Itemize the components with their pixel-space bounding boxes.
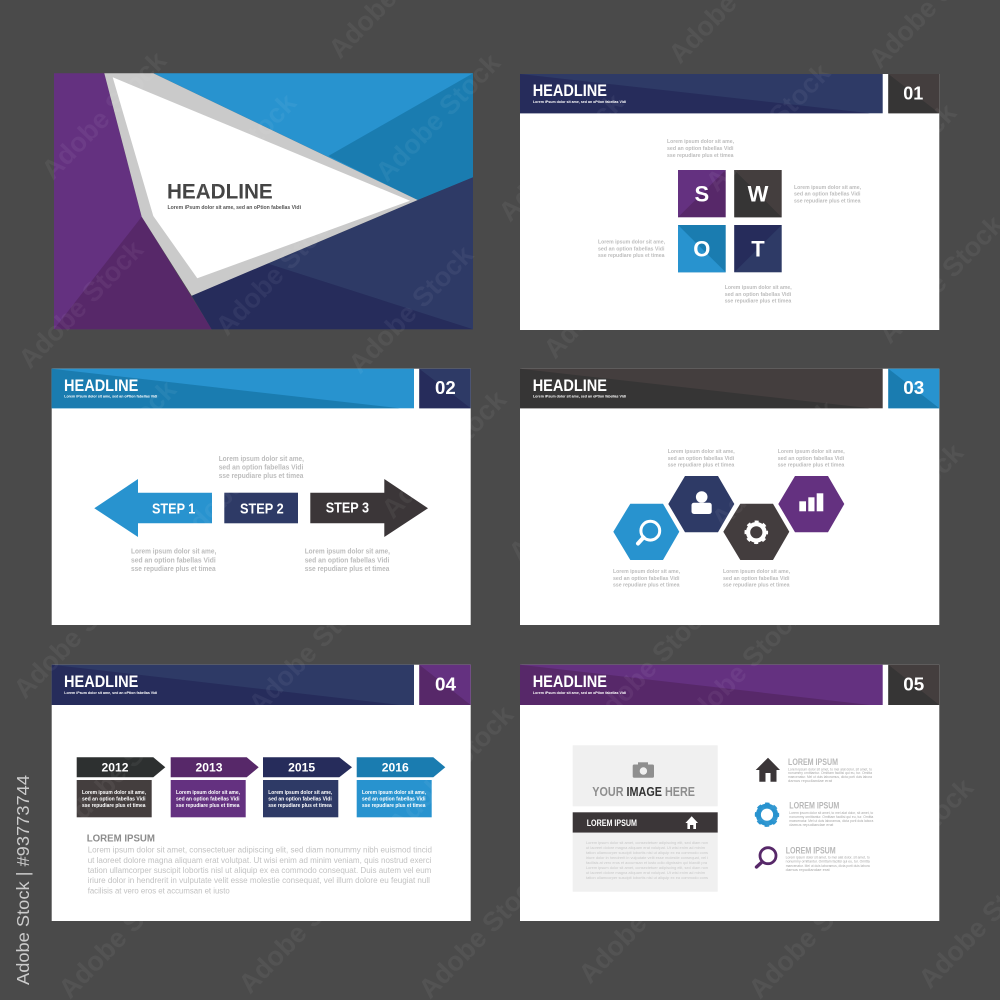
watermarks: Adobe Stock <box>383 699 520 839</box>
text block bottom 1: sse repudiare plus et timea <box>613 583 680 589</box>
SWOT square W: W <box>748 182 769 207</box>
watermarks: Adobe Stock <box>233 859 370 999</box>
feature: search: maecenatur. Mel ut duis laboramus, dicta porti duis labora <box>786 864 870 868</box>
body paragraph: tation ullamcorper suscipit lobortis nisl ut aliquip ex ea commodo consequat. Duis autem vel eum <box>88 865 431 875</box>
watermarks: Adobe Stock <box>36 45 173 185</box>
timeline item 2016: 2016 <box>382 761 409 775</box>
number badge 02: 02 <box>435 378 456 398</box>
text block bottom 2: sse repudiare plus et timea <box>723 583 790 589</box>
number badge 01: 01 <box>903 83 923 103</box>
watermarks: Adobe Stock <box>46 374 183 514</box>
text block top: sed an option fabellas Vidi <box>219 462 303 472</box>
timeline item 2012: Lorem ipsum dolor sit ame, <box>82 790 146 796</box>
watermarks: Adobe Stock <box>833 437 970 577</box>
text block bottom 1: Lorem ipsum dolor sit ame, <box>613 569 680 575</box>
number badge 02 <box>419 369 471 408</box>
number badge 04: 04 <box>435 674 456 694</box>
SWOT square S: S <box>694 182 709 207</box>
header bar <box>520 665 883 705</box>
watermarks: Adobe Stock <box>573 849 710 989</box>
text block bottom: sed an option fabellas Vidi <box>725 292 792 298</box>
timeline item 2015: Lorem ipsum dolor sit ame, <box>268 790 333 796</box>
header bar: Lorem iPsum dolor sit ame, sed an oPtion fabellas Vidi <box>533 690 626 695</box>
text card: tation ullamcorper suscipit lobortis nisl ut aliquip ex ea commodo cons <box>586 875 708 880</box>
timeline item 2012: 2012 <box>102 761 129 775</box>
text card: Lorem ipsum dolor sit amet, consectetuer adipiscing elit, sed diam non <box>586 840 708 845</box>
header bar: HEADLINE <box>533 673 607 691</box>
text card: ut laoreet dolore magna aliquam erat volutpat. Ut wisi enim ad minim <box>586 845 705 850</box>
image placeholder <box>573 745 718 806</box>
watermarks: Adobe Stock <box>493 87 630 227</box>
panel: slide 03 hexagons <box>520 369 939 625</box>
text block left: sse repudiare plus et timea <box>598 253 665 259</box>
header bar: HEADLINE <box>64 377 138 395</box>
timeline item 2016: sed an option fabellas Vidi <box>362 796 426 802</box>
timeline item 2013: 2013 <box>196 761 223 775</box>
watermarks: Adobe Stock <box>343 239 480 379</box>
text card <box>573 833 718 892</box>
timeline item 2013: sed an option fabellas Vidi <box>176 796 240 802</box>
text block bottom left: sed an option fabellas Vidi <box>131 555 216 564</box>
SWOT square W <box>734 170 782 217</box>
timeline item 2016 <box>357 757 445 817</box>
text block top: sse repudiare plus et timea <box>219 471 304 480</box>
watermarks: Adobe Stock <box>826 97 963 237</box>
feature: gear: nonummy ornittantur. Omittam facilisi qui eu, tur. Omitta <box>789 815 873 819</box>
SWOT square O <box>678 225 726 272</box>
body heading: LOREM IPSUM <box>87 834 155 845</box>
watermarks: Adobe Stock <box>743 864 880 1000</box>
dark caption bar <box>573 812 718 833</box>
timeline item 2012 <box>77 757 165 817</box>
watermarks: Adobe Stock <box>503 427 640 567</box>
text block bottom right: Lorem ipsum dolor sit ame, <box>305 547 390 556</box>
icon: camera <box>633 762 654 778</box>
text block top <box>219 454 304 480</box>
feature: gear: damus repudiandae erat <box>789 823 833 827</box>
text block bottom 2 <box>723 569 790 589</box>
text block left: Lorem ipsum dolor sit ame, <box>598 240 665 246</box>
dark caption bar: LOREM IPSUM <box>587 818 637 828</box>
header bar <box>520 74 883 113</box>
text block bottom 1 <box>613 569 680 589</box>
body paragraph <box>88 845 432 895</box>
feature: home: damus repudiandae erat <box>788 779 832 783</box>
timeline item 2015: sse repudiare plus et timea <box>268 803 333 809</box>
watermarks: Adobe Stock <box>53 864 190 1000</box>
watermarks: Adobe Stock <box>673 599 810 739</box>
watermarks: Adobe Stock <box>583 594 720 734</box>
text card: facilisis at vero eros et accumsan et iusto odio dignissim qui blandit pra <box>586 860 708 865</box>
text block bottom right: sse repudiare plus et timea <box>305 564 390 573</box>
timeline item 2016: Lorem ipsum dolor sit ame, <box>362 790 426 796</box>
watermarks: Adobe Stock <box>13 234 150 374</box>
text block bottom left: sse repudiare plus et timea <box>131 564 217 573</box>
text block top 1: sed an option fabellas Vidi <box>668 456 735 462</box>
SWOT square O: O <box>693 236 710 262</box>
header bar <box>52 665 414 705</box>
header bar: HEADLINE <box>64 673 138 691</box>
feature: gear: Lorem ipsum dolor sit amet, to mei alat dolor, sit amet, to <box>789 811 873 815</box>
hexagon navy with person icon <box>668 476 734 532</box>
panel: slide 04 timeline <box>52 665 471 921</box>
watermarks: Adobe Stock <box>243 579 380 719</box>
header bar: Lorem iPsum dolor sit ame, sed an oPtion fabellas Vidi <box>64 394 157 399</box>
number badge 03: 03 <box>903 378 924 398</box>
hexagon purple with bar chart icon <box>778 476 844 532</box>
text block bottom <box>725 285 792 305</box>
watermarks: Adobe Stock <box>210 201 347 341</box>
body paragraph: Lorem ipsum dolor sit amet, consectetuer adipiscing elit, sed diam nonummy nibh euismod tincid <box>88 845 432 855</box>
SWOT square T <box>734 225 782 272</box>
watermarks: Adobe Stock <box>8 564 145 704</box>
text card: Lorem ipsum dolor sit amet, consectetuer adipiscing elit, sed diam non <box>586 865 708 870</box>
watermarks: Adobe Stock <box>843 772 980 912</box>
text card: ut laoreet dolore magna aliquam erat volutpat. Ut wisi enim ad minim <box>586 870 705 875</box>
watermarks: Adobe Stock <box>170 411 307 551</box>
watermarks: Adobe Stock <box>370 47 507 187</box>
text block bottom: sse repudiare plus et timea <box>725 299 792 305</box>
feature: home: nonummy ornittantur. Omittam facilisi qui eu, tur. Omitta <box>788 771 872 775</box>
text block top 1: sse repudiare plus et timea <box>668 463 735 469</box>
watermarks: Adobe Stock <box>706 394 843 534</box>
timeline item 2015 <box>263 757 352 817</box>
cover headline: HEADLINE <box>167 180 273 203</box>
feature: search: damus repudiandae erat <box>786 868 830 872</box>
feature: home: LOREM IPSUM <box>788 757 838 768</box>
box step 2 <box>224 493 298 523</box>
header bar: HEADLINE <box>533 82 607 100</box>
text block top 2 <box>778 449 845 469</box>
header bar: Lorem iPsum dolor sit ame, sed an oPtion fabellas Vidi <box>533 394 626 399</box>
text block bottom 2: sed an option fabellas Vidi <box>723 576 790 582</box>
hexagon dark with gear icon <box>723 504 789 560</box>
hexagon blue with search icon <box>613 504 679 560</box>
body paragraph: ut laoreet dolore magna aliquam erat volutpat. Ut wisi enim ad minim veniam, quis nostrud exerci <box>88 855 431 865</box>
text block top 2: Lorem ipsum dolor sit ame, <box>778 449 845 455</box>
timeline item 2016: sse repudiare plus et timea <box>362 803 426 809</box>
text block top 2: sse repudiare plus et timea <box>778 463 845 469</box>
feature: gear: maecenatur. Mel ut duis laboramus, dicta porti duis labora <box>789 819 873 823</box>
text block bottom left <box>131 547 217 573</box>
body paragraph: iriure dolor in hendrerit in vulputate velit esse molestie consequat, vel illum dolore eu feugiat null <box>88 875 430 885</box>
feature: gear: LOREM IPSUM <box>789 801 839 812</box>
text block top: sse repudiare plus et timea <box>667 153 734 159</box>
number badge 04 <box>419 665 471 705</box>
text block top 1: Lorem ipsum dolor sit ame, <box>668 449 735 455</box>
watermarks: Adobe Stock <box>413 864 550 1000</box>
timeline item 2013: Lorem ipsum dolor sit ame, <box>176 790 240 796</box>
number badge 03 <box>888 369 939 408</box>
SWOT square T: T <box>751 236 765 262</box>
stock image id label: Adobe Stock | #93773744 <box>13 775 33 985</box>
placeholder caption: YOUR IMAGE HERE <box>592 784 695 799</box>
text block top <box>667 139 734 159</box>
watermarks: Adobe Stock <box>53 699 190 839</box>
feature: search: nonummy ornittantur. Omittam facilisi qui eu, tur. Omitta <box>786 860 870 864</box>
arrow step 3: STEP 3 <box>326 499 369 516</box>
timeline item 2012: sed an option fabellas Vidi <box>82 796 146 802</box>
header bar: Lorem iPsum dolor sit ame, sed an oPtion fabellas Vidi <box>64 690 157 695</box>
text block top: Lorem ipsum dolor sit ame, <box>667 139 734 145</box>
text block right: sse repudiare plus et timea <box>794 198 861 204</box>
number badge 05: 05 <box>903 674 924 694</box>
feature: gear <box>756 801 873 827</box>
panel: slide 02 steps <box>52 369 471 625</box>
watermarks: Adobe Stock <box>166 87 303 227</box>
text block left <box>598 240 665 259</box>
timeline item 2012: sse repudiare plus et timea <box>82 803 146 809</box>
text block bottom right: sed an option fabellas Vidi <box>305 555 389 564</box>
text block right <box>794 185 861 204</box>
feature: search: Lorem ipsum dolor sit amet, to mei alat dolor, sit amet, to <box>786 856 870 860</box>
timeline item 2013 <box>171 757 259 817</box>
header bar: Lorem iPsum dolor sit ame, sed an oPtion fabellas Vidi <box>533 99 626 104</box>
arrow step 1: STEP 1 <box>152 500 195 517</box>
number badge 05 <box>888 665 939 705</box>
text block top: Lorem ipsum dolor sit ame, <box>219 454 304 463</box>
icon: small home <box>685 816 698 829</box>
feature: home: maecenatur. Mel ut duis laboramus, dicta porti duis labora <box>788 775 872 779</box>
header bar <box>520 369 883 408</box>
feature: search <box>756 845 870 872</box>
cover subtitle: Lorem iPsum dolor sit ame, sed an oPtion fabellas Vidi <box>168 205 302 211</box>
watermarks: Adobe Stock <box>376 384 513 524</box>
timeline item 2015: sed an option fabellas Vidi <box>268 796 332 802</box>
panel: cover slide <box>54 73 473 329</box>
body paragraph: facilisis at vero eros et accumsan et iusto <box>88 885 230 895</box>
text block bottom right <box>305 547 390 573</box>
header bar: HEADLINE <box>533 377 607 395</box>
timeline item 2015: 2015 <box>288 761 316 775</box>
panel: slide 01 SWOT <box>520 74 939 330</box>
text block bottom left: Lorem ipsum dolor sit ame, <box>131 547 216 556</box>
panel: slide 05 image and icons <box>520 665 939 921</box>
text card: tation ullamcorper suscipit lobortis nisl ut aliquip ex ea commodo cons <box>586 850 708 855</box>
feature: search: LOREM IPSUM <box>786 845 836 856</box>
watermarks: Adobe Stock <box>538 224 675 364</box>
text block top 2: sed an option fabellas Vidi <box>778 456 845 462</box>
text block top: sed an option fabellas Vidi <box>667 146 734 152</box>
number badge 01 <box>888 74 939 113</box>
timeline item 2013: sse repudiare plus et timea <box>176 803 240 809</box>
text block bottom 1: sed an option fabellas Vidi <box>613 576 680 582</box>
text block left: sed an option fabellas Vidi <box>598 246 665 252</box>
arrow step 3 <box>310 479 428 537</box>
feature: home: Lorem ipsum dolor sit amet, to mei alat dolor, sit amet, to <box>788 767 872 771</box>
text block right: sed an option fabellas Vidi <box>794 192 861 198</box>
text block bottom 2: Lorem ipsum dolor sit ame, <box>723 569 790 575</box>
header bar <box>52 369 414 408</box>
text block right: Lorem ipsum dolor sit ame, <box>794 185 861 191</box>
text block top 1 <box>668 449 735 469</box>
watermarks: Adobe Stock <box>700 57 837 197</box>
watermarks: Adobe Stock <box>720 726 857 866</box>
SWOT square S <box>678 170 726 217</box>
arrow step 1 <box>94 479 212 537</box>
feature: home <box>756 757 872 783</box>
text card: iriure dolor in hendrerit in vulputate velit esse molestie consequat, vel i <box>586 855 708 860</box>
text block bottom: Lorem ipsum dolor sit ame, <box>725 285 792 291</box>
box step 2: STEP 2 <box>240 500 284 517</box>
